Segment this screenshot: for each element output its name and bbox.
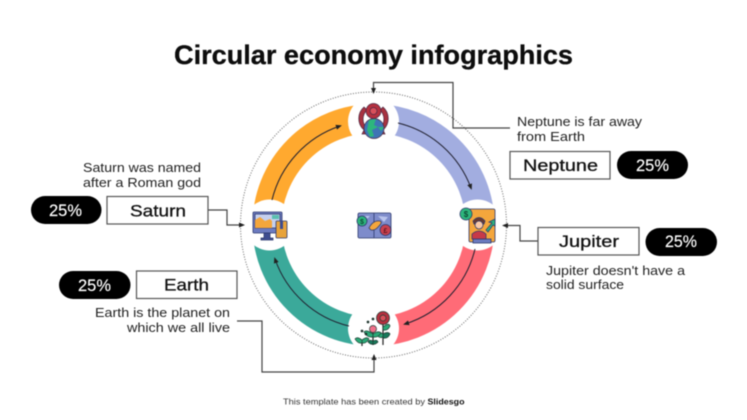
Saturn label box [107, 196, 208, 224]
icon: centre world map with coins: $ [360, 219, 364, 226]
Jupiter label: Jupiter [559, 232, 619, 251]
arrow: red segment [405, 249, 475, 324]
Neptune percent pill [617, 151, 688, 179]
icon: centre world map with coins: £ [384, 228, 388, 235]
Jupiter percent: 25% [665, 232, 697, 251]
Saturn description: Saturn was named [83, 160, 201, 175]
callout: Earth [59, 271, 237, 335]
callout: Saturn [31, 160, 208, 224]
Jupiter description line 2: solid surface [546, 277, 624, 292]
Saturn percent: 25% [49, 201, 82, 220]
Neptune label: Neptune [523, 156, 598, 175]
Earth description line 2: which we all live [126, 320, 230, 335]
Jupiter description: Jupiter doesn't have a [546, 263, 686, 278]
connector: Neptune [374, 82, 510, 128]
title: Circular economy infographics [174, 40, 573, 70]
icon: mobile with investor and coin [460, 208, 495, 243]
footer credit: This template has been created by [283, 398, 426, 406]
icon: globe with coin and arrows [359, 104, 388, 138]
Jupiter label box [538, 228, 639, 255]
arrow: teal segment [275, 259, 349, 326]
Earth percent pill [59, 271, 130, 299]
Neptune label box [510, 152, 610, 179]
white gaps around icons [244, 96, 503, 354]
ring segment: teal [267, 225, 374, 332]
ring segment: blue [374, 118, 480, 225]
connector: Jupiter [504, 226, 538, 241]
Earth description: Earth is the planet on [95, 305, 230, 320]
circular diagram ring [244, 96, 503, 354]
ring segment: orange [267, 118, 374, 225]
callout: Neptune [510, 114, 688, 179]
Saturn label: Saturn [130, 202, 186, 220]
dotted outer circle [240, 92, 506, 358]
icon: monitor with chart and package [253, 212, 287, 240]
Earth percent: 25% [78, 276, 111, 295]
ring segment: red [374, 225, 480, 332]
Saturn description line 2: after a Roman god [83, 175, 201, 190]
Neptune percent: 25% [636, 156, 669, 175]
footer credit: Slidesgo [428, 398, 464, 406]
connector: Earth [237, 321, 374, 372]
Neptune description line 2: from Earth [517, 129, 585, 144]
arrow: blue segment [398, 123, 471, 188]
arrow: orange segment [272, 126, 340, 200]
Earth label: Earth [164, 276, 209, 294]
icon: mobile with investor and coin: $ [464, 210, 469, 219]
connector: Saturn [208, 210, 243, 225]
icon: centre world map with coins [357, 213, 391, 238]
icon: plants with coin [355, 312, 390, 346]
callout: Jupiter [538, 228, 717, 292]
Saturn percent pill [31, 196, 102, 224]
Jupiter percent pill [646, 228, 717, 256]
Earth label box [136, 271, 237, 298]
Neptune description: Neptune is far away [517, 114, 643, 129]
